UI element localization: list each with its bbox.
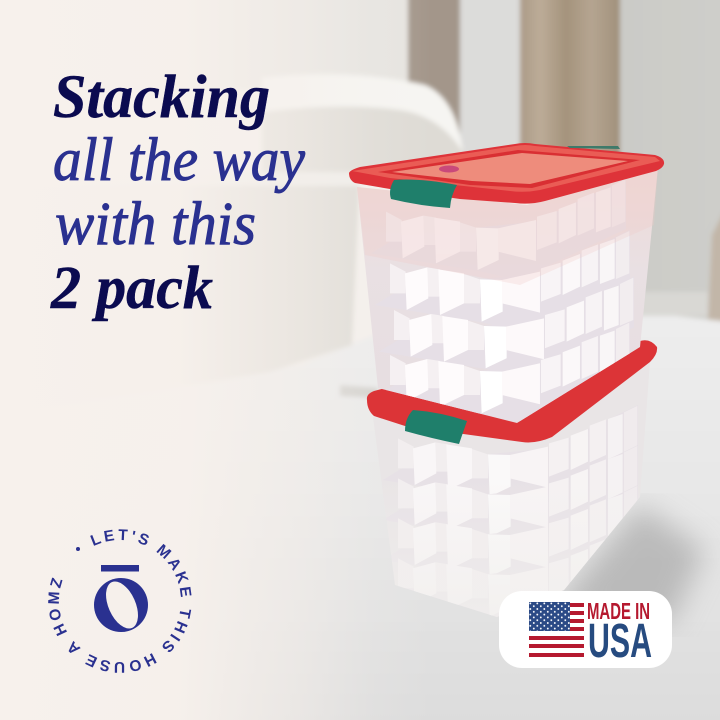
logo badge: LET'S MAKE THIS HOUSE A HOMZ xyxy=(48,529,192,673)
red lid xyxy=(349,143,664,204)
top storage box xyxy=(349,143,664,423)
circular slogan xyxy=(59,540,181,662)
made in USA badge: MADE IN xyxy=(587,598,650,624)
ornament dividers xyxy=(371,178,634,422)
headline: with this xyxy=(55,191,256,258)
box body xyxy=(357,167,658,423)
lid top panel xyxy=(392,153,628,184)
box body xyxy=(373,362,650,617)
floor shadow xyxy=(550,505,705,625)
dot xyxy=(76,547,80,551)
flag xyxy=(529,602,584,657)
purple mark xyxy=(439,166,459,172)
made in USA badge: USA xyxy=(588,615,652,668)
green latch xyxy=(390,180,457,208)
headline xyxy=(50,64,306,322)
headline: Stacking xyxy=(53,64,270,131)
made in USA badge xyxy=(499,591,672,668)
bottom storage box xyxy=(367,340,660,625)
red lid xyxy=(367,340,657,442)
logo mark xyxy=(94,565,148,633)
headline: 2 pack xyxy=(50,255,213,322)
top tier pink tint xyxy=(357,167,658,285)
lid top rim xyxy=(352,145,660,192)
back handle xyxy=(567,146,620,149)
lid rim xyxy=(349,143,664,204)
green latch xyxy=(405,410,467,444)
headline: all the way xyxy=(53,127,306,194)
lid channel xyxy=(378,150,640,188)
ornament dividers xyxy=(398,414,622,616)
